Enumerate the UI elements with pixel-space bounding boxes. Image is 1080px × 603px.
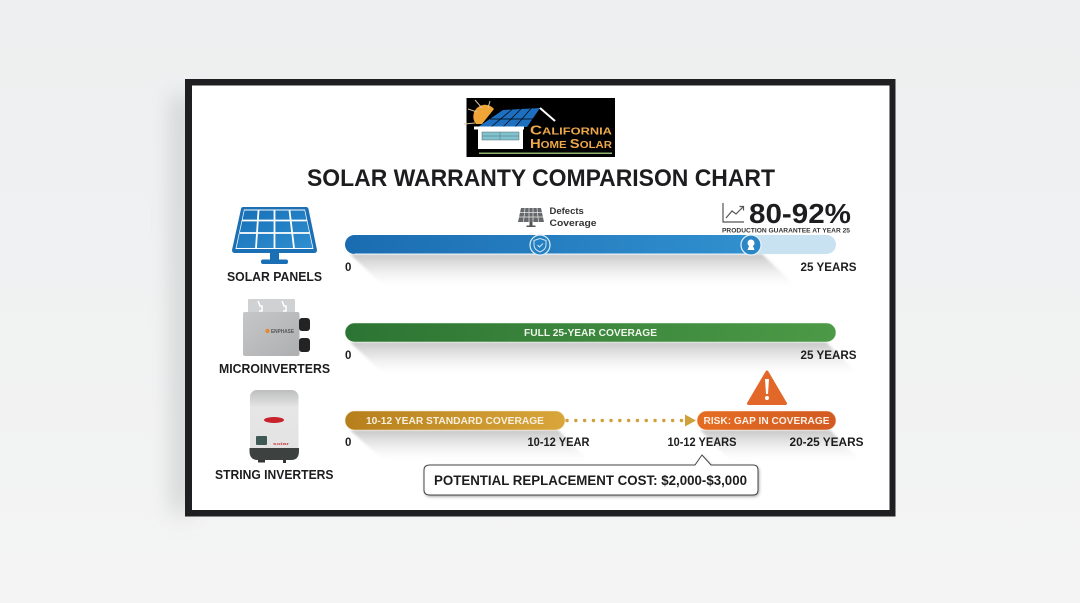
callout: replacement cost	[424, 455, 759, 496]
row: microinverters	[219, 299, 862, 378]
bar shadows	[350, 430, 864, 464]
axis labels	[345, 437, 864, 449]
bar: standard coverage	[345, 411, 565, 430]
label: defects coverage	[550, 206, 596, 229]
bar: production guarantee tail	[345, 235, 836, 254]
bar shadow	[350, 254, 800, 290]
label: microinverters: MICROINVERTERS	[219, 362, 330, 376]
axis labels: 0	[345, 437, 351, 449]
label: defects coverage: Defects	[550, 206, 584, 217]
logo: California Home Solar	[464, 98, 615, 157]
axis labels: 0	[345, 350, 351, 362]
bar label: FULL 25-YEAR COVERAGE	[524, 328, 657, 339]
bar label: 10-12 YEAR STANDARD COVERAGE	[366, 416, 544, 427]
logo wordmark: C ALIFORNIA	[530, 122, 612, 138]
picture frame	[185, 79, 896, 516]
icon: microinverter	[243, 299, 310, 356]
logo wordmark: HOME SOLAR	[530, 136, 613, 151]
bar: risk gap	[697, 411, 836, 430]
icon: microinverter: ENPHASE	[271, 329, 294, 335]
axis labels: 20-25 YEARS	[790, 437, 864, 449]
dotted arrow	[567, 414, 696, 426]
icon: warning triangle	[748, 372, 786, 404]
icon: growth chart	[723, 203, 744, 222]
axis labels: 10-12 YEARS	[668, 437, 737, 449]
label: string inverters: STRING INVERTERS	[215, 468, 334, 482]
icon: ribbon badge	[741, 235, 761, 255]
bar label: RISK: GAP IN COVERAGE	[704, 416, 830, 427]
bar: full coverage	[345, 323, 836, 342]
icon: roof solar array	[478, 108, 555, 127]
axis labels: 25 YEARS	[800, 350, 857, 362]
icon: string inverter: solar	[273, 441, 290, 446]
stat: 80-92%: 80-92%	[749, 198, 851, 229]
axis labels: 10-12 YEAR	[528, 437, 590, 449]
row: solar panels	[227, 198, 857, 290]
icon: sun	[464, 100, 494, 124]
bar: defects coverage	[345, 235, 752, 254]
axis labels	[345, 350, 857, 362]
row: string inverters	[215, 372, 864, 496]
axis labels	[345, 262, 857, 274]
callout: replacement cost: POTENTIAL REPLACEMENT COST: $2,000-$3,000	[434, 473, 747, 488]
icon: mini solar panel	[518, 208, 544, 227]
bar shadow	[350, 342, 862, 378]
axis labels: 0	[345, 262, 351, 274]
icon: shield badge	[530, 235, 550, 255]
icon: string inverter	[250, 390, 299, 463]
label: defects coverage: Coverage	[550, 218, 596, 229]
icon: house	[474, 126, 524, 149]
logo wordmark	[530, 122, 613, 151]
axis labels: 25 YEARS	[800, 262, 857, 274]
label: solar panels: SOLAR PANELS	[227, 270, 322, 284]
title: SOLAR WARRANTY COMPARISON CHART	[307, 165, 775, 192]
icon: solar panel	[232, 207, 317, 264]
caption: production guarantee: PRODUCTION GUARANTEE AT YEAR 25	[722, 228, 851, 234]
